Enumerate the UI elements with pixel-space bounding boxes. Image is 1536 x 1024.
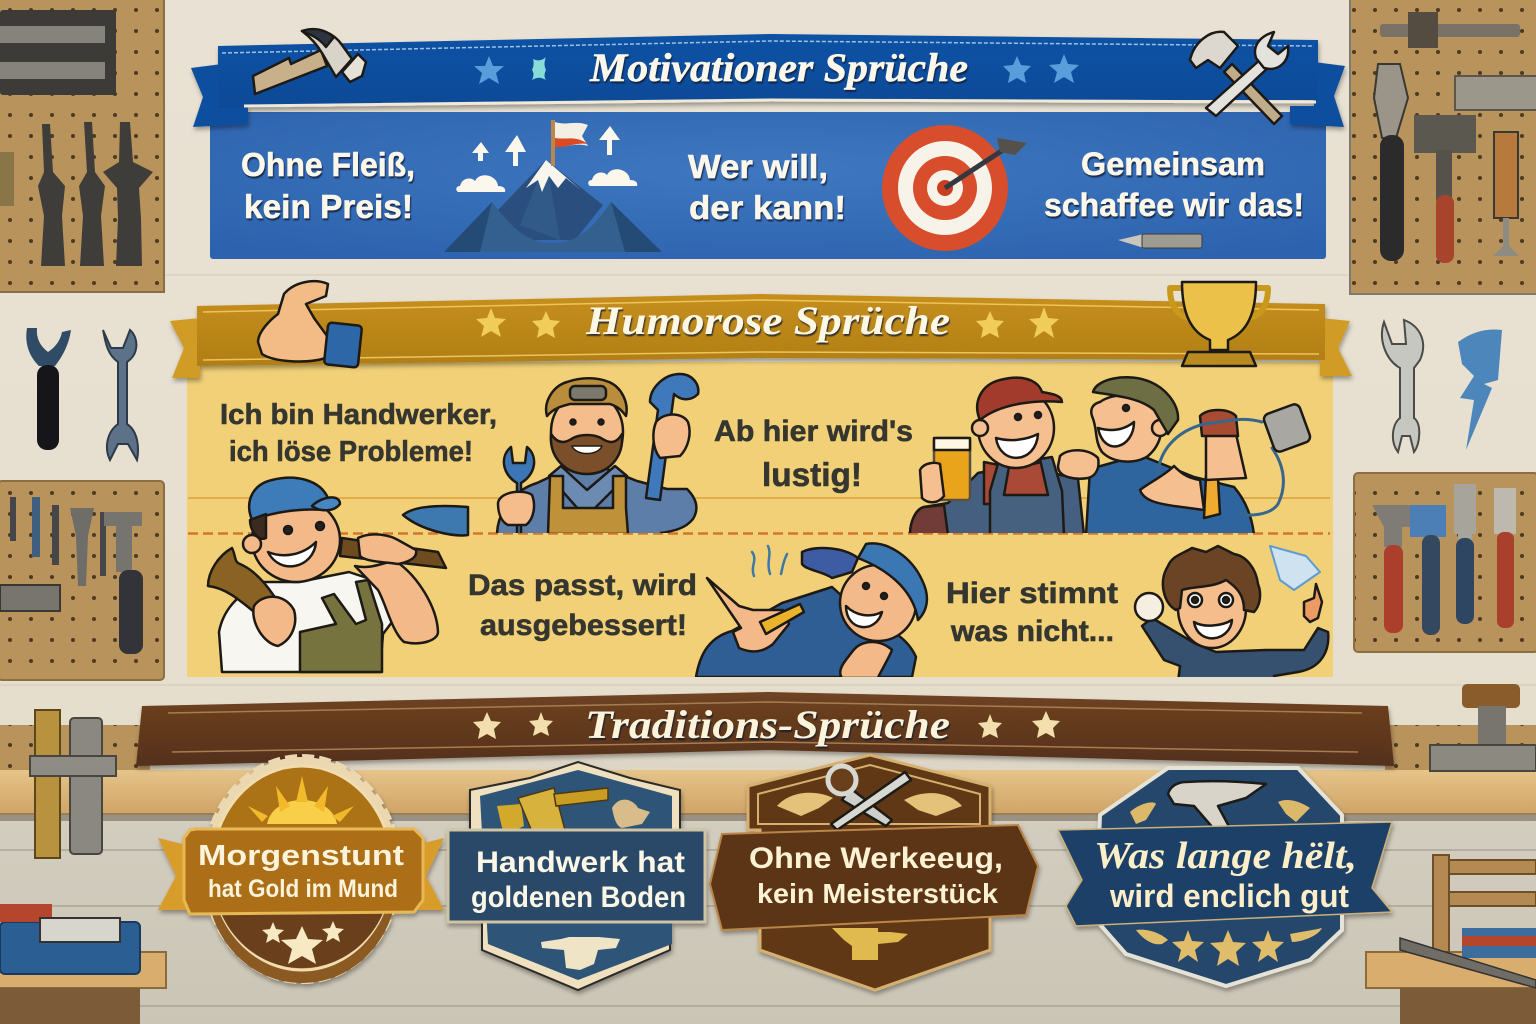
icon: metal clamps (0, 10, 116, 95)
text: Das passt: Das passt, wird (468, 569, 697, 602)
text: Ohne Fleiß: kein Preis! (244, 188, 413, 225)
text: Hier stimnt: Hier stimnt (946, 577, 1118, 610)
icon: blue toolbox (0, 904, 140, 974)
icon: target with arrow (882, 125, 1027, 251)
ribbon and text (710, 825, 1038, 930)
icon: gold tool (832, 928, 908, 960)
icon: cream stars right (978, 711, 1060, 738)
yellow text panel (187, 362, 1333, 677)
pegboard: middle right (1354, 473, 1536, 652)
icon: blue stars right (1003, 54, 1079, 83)
ribbon and text (448, 830, 705, 922)
character: two workers laughing with beer (910, 377, 1312, 535)
icon: crossed hammer and wrench (1190, 32, 1288, 124)
icon: hanging tool set (1372, 484, 1516, 635)
icon: sun (248, 776, 354, 824)
pegboard: top left with tools (0, 0, 164, 292)
workbench right with crate (1366, 855, 1536, 1024)
ribbon and text: Ohne Werkeeug, (749, 842, 1003, 875)
text: Ab hier wird's lustig (714, 415, 913, 493)
icon: metal block (1455, 76, 1536, 110)
workbench left with toolbox (0, 904, 166, 1024)
panel: motivational sayings (191, 29, 1345, 259)
icon: metal rod (0, 585, 60, 611)
ribbon and text: kein Meisterstück (757, 878, 998, 909)
ribbon and text (158, 829, 444, 914)
character: falling worker (696, 543, 927, 678)
icon: drill bit (1118, 234, 1202, 248)
badge: Was lange hält (1058, 768, 1392, 986)
icon: silver tool (1168, 781, 1266, 836)
panel: traditional sayings (136, 692, 1394, 990)
ribbon: humorous heading (170, 294, 1352, 378)
icon: blue wrench (103, 330, 138, 460)
ribbon and text: goldenen Boden (471, 881, 686, 914)
icon: metal tool on bench (1400, 928, 1536, 988)
text: Wer will: der kann! (689, 189, 846, 226)
character: smiling worker with hammer (208, 478, 468, 672)
character: surprised worker with messy hair (1134, 544, 1330, 677)
text: Ab hier wird's lustig: Ab hier wird's (714, 415, 913, 448)
icon: chisel (1493, 132, 1519, 256)
text: Gemeinsam (1044, 146, 1304, 223)
character: bearded craftsman with wrenches (497, 374, 698, 539)
heading: Motivationer Sprüche: Motivationer Sprüche (589, 45, 968, 90)
badge: Ohne Werkzeug (710, 755, 1038, 990)
icon: stars (262, 921, 344, 964)
icon: golden tool (497, 788, 608, 846)
text: Wer will: Wer will, (688, 148, 828, 185)
badge: Morgenstunt (158, 757, 444, 983)
heading: Humorose Sprüche: Humorose Sprüche (585, 298, 950, 343)
pegboard: top right with tools (1350, 0, 1536, 294)
text: Hier stimnt (946, 577, 1118, 648)
icon: bench vise on the right (1430, 684, 1536, 771)
icon: mountain with flag (444, 120, 662, 252)
icon: gold stars right (976, 307, 1059, 338)
text: Hier stimnt: was nicht... (950, 615, 1114, 648)
icon: gold stars left (476, 308, 560, 338)
text: Ohne Fleiß (241, 146, 415, 225)
icon: red handled tool (1414, 115, 1476, 263)
ribbon and text: hat Gold im Mund (208, 875, 398, 903)
ribbon and text: Was lange hëlt, (1094, 835, 1357, 877)
text: Gemeinsam: schaffee wir das! (1044, 187, 1304, 223)
ribbon: motivational heading (191, 34, 1345, 127)
icon: wooden crate (1433, 855, 1536, 952)
ribbon and text: Handwerk hat (476, 846, 685, 879)
shelf with pegboard strips (0, 684, 1536, 858)
ribbon: traditional heading (136, 692, 1394, 766)
icon: hammer (253, 29, 366, 94)
badge: Handwerk hat goldenen Boden (448, 762, 705, 990)
text: Gemeinsam: Gemeinsam (1081, 146, 1265, 182)
icon: top bar tool (1380, 12, 1520, 48)
icon: small cream shape (612, 800, 650, 828)
text: Das passt (468, 569, 697, 642)
text: Wer will (688, 148, 846, 226)
icon: cream stars left (473, 712, 553, 739)
pegboard: middle left (0, 481, 164, 680)
icon: gold stars (1136, 928, 1322, 966)
ribbon and text: Morgenstunt (198, 840, 404, 872)
text: Ich bin Handwerker (220, 399, 497, 468)
icon: gold wings (777, 793, 962, 816)
icon: hanging pliers (0, 122, 153, 266)
panel: humorous sayings (170, 281, 1352, 698)
icon: large hanging tool (104, 512, 143, 654)
icon: crossed tools (828, 766, 911, 830)
icon: cream tool (541, 937, 620, 970)
heading: Traditions-Sprüche: Traditions-Sprüche (585, 702, 950, 747)
icon: flexing arm (258, 281, 362, 368)
icon: blue stars left (474, 56, 546, 84)
icon: clamps on the left (30, 710, 116, 858)
icon: trophy (1170, 282, 1268, 366)
text: Ich bin Handwerker: Ich bin Handwerker, (220, 399, 497, 431)
text: Das passt: ausgebessert! (480, 609, 687, 642)
icon: blue lightning tool (1458, 330, 1502, 450)
text: Ab hier wird's lustig: lustig! (762, 456, 862, 493)
icon: adjustable wrench (1374, 64, 1408, 261)
blue text panel (210, 112, 1326, 259)
icon: silver wrench (1382, 320, 1423, 452)
icon: gold leaves top (1130, 800, 1310, 824)
text: Ohne Fleiß: Ohne Fleiß, (241, 146, 415, 183)
text: Ich bin Handwerker: ich löse Probleme! (229, 436, 473, 468)
ribbon and text (1058, 822, 1392, 926)
icon: small tools row (10, 497, 106, 586)
icon: black pliers (26, 328, 71, 450)
ribbon and text: wird enclich gut (1109, 878, 1349, 914)
